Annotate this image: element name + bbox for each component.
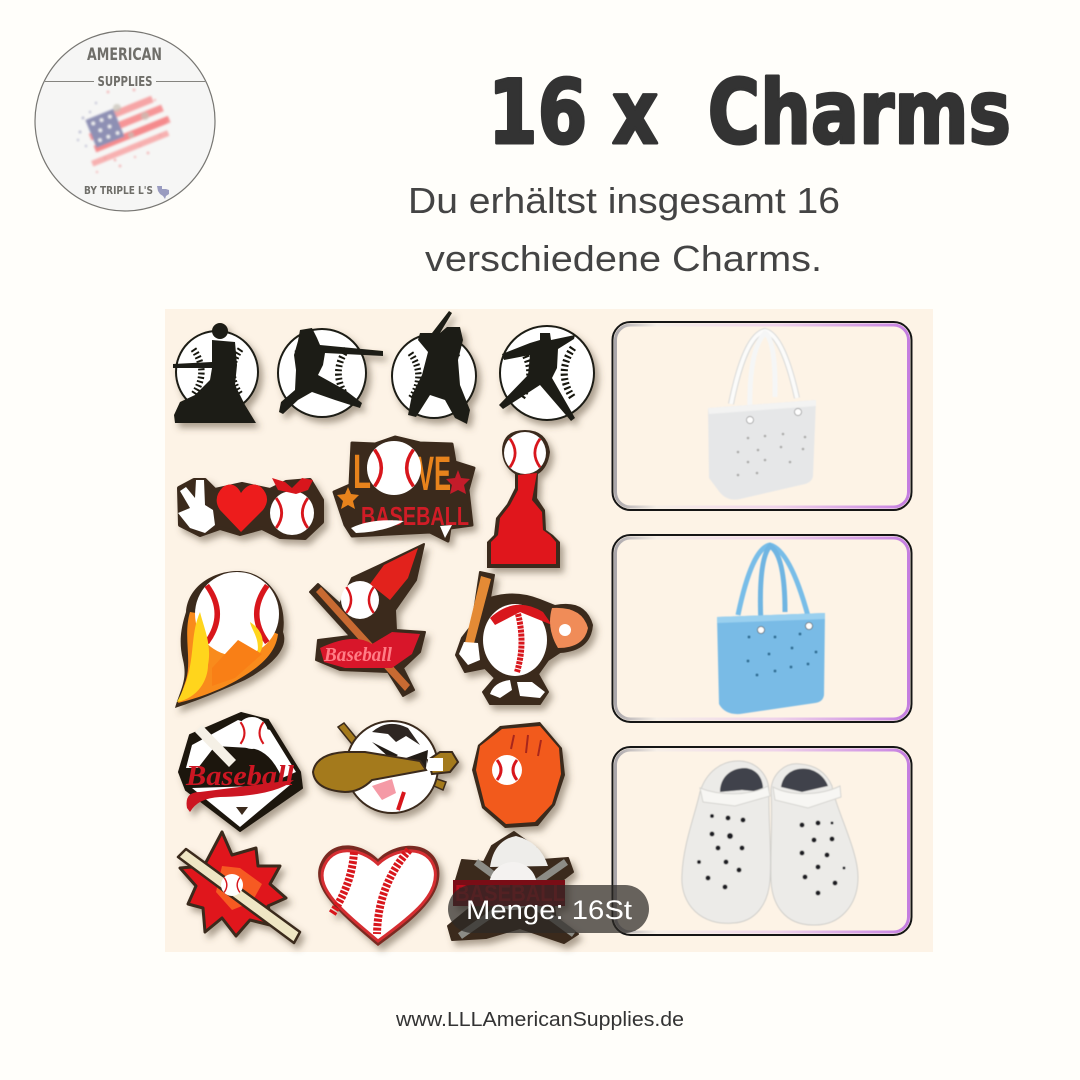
- charm: peace heart ball: [178, 478, 322, 538]
- charm: angry ball and bat: [313, 721, 458, 813]
- charm: Baseball crossed bats with cap: [448, 832, 578, 943]
- bag panel: white clogs: [612, 747, 912, 935]
- charm: Love Baseball: VE: [417, 448, 451, 501]
- product image panel: [165, 309, 933, 952]
- charm: batter 2: [278, 328, 383, 417]
- quantity pill: [448, 885, 649, 933]
- charm: flaming ball: [175, 571, 284, 708]
- charm: Baseball crossed bats with cap: BASEBALL: [455, 880, 565, 906]
- charm: Love Baseball: BASEBALL: [361, 501, 469, 531]
- charm: Baseball diamond: [179, 713, 302, 831]
- quantity pill: Menge: 16St: [466, 895, 633, 925]
- charm: bat burst: [178, 832, 300, 943]
- charm: Love Baseball: L: [353, 446, 371, 499]
- charm: Love Baseball: [334, 437, 474, 541]
- logo divider and supplies: SUPPLIES: [98, 75, 152, 90]
- charm: batter 1: [173, 323, 258, 423]
- logo text: American: AMERICAN: [87, 45, 162, 65]
- logo text: by Triple L's: BY TRIPLE L'S: [84, 185, 153, 197]
- charm: bat with flame ball: [310, 544, 425, 696]
- charm: heart ball: [318, 845, 439, 946]
- footer url: www.LLLAmericanSupplies.de: [395, 1009, 684, 1031]
- charm: Baseball diamond: Baseball: [185, 761, 294, 792]
- charm: trophy: [487, 430, 560, 568]
- charm: pitcher: [499, 326, 594, 421]
- white clogs: [682, 761, 858, 925]
- logo badge: [35, 31, 215, 211]
- logo flag splash: [76, 89, 175, 173]
- white tote bag: [708, 331, 816, 500]
- bag panel: blue tote: [612, 535, 912, 722]
- charm: batter 3: [392, 311, 476, 424]
- subtitle: verschiedene Charms.: [425, 238, 822, 279]
- charm: bat with flame ball: Baseball: [323, 644, 392, 666]
- charm: ball character: [456, 572, 592, 704]
- blue tote bag: [717, 545, 825, 714]
- logo Texas icon: [157, 186, 169, 199]
- subtitle: [408, 180, 840, 279]
- subtitle: Du erhältst insgesamt 16: [408, 180, 840, 221]
- charm: glove: [472, 722, 565, 828]
- bag panel: white tote: [612, 322, 912, 510]
